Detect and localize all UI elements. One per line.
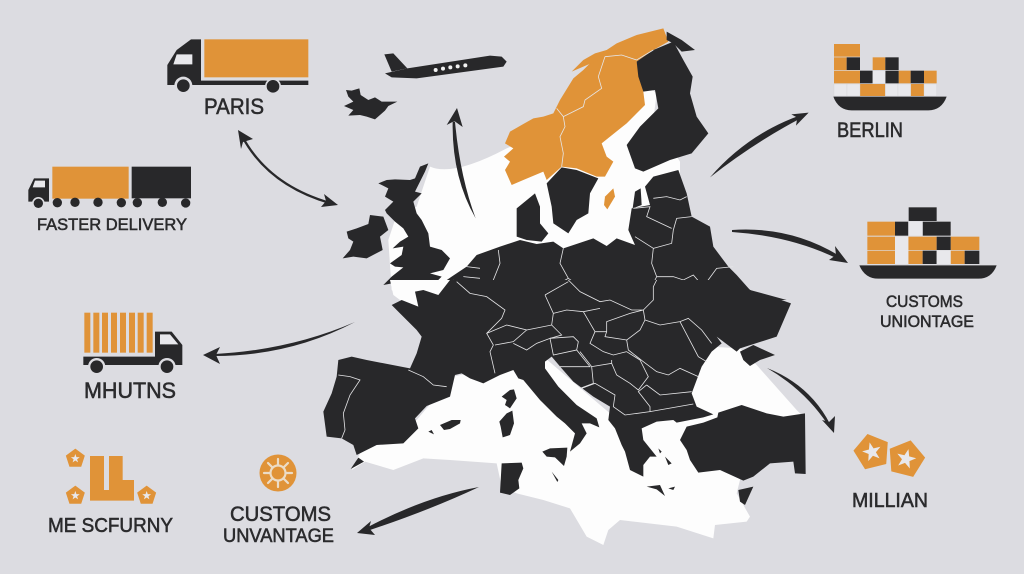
arrow: toward Berlin ship <box>710 113 809 177</box>
arrow: toward Mhutns truck <box>203 322 355 364</box>
label: Uniontage: UNIONTAGE <box>880 312 974 331</box>
label: Customs: CUSTOMS <box>230 503 331 526</box>
arrow: toward customs ship <box>732 230 848 263</box>
northern borders <box>453 50 733 300</box>
Corsica <box>502 389 517 408</box>
label: Customs: CUSTOMS <box>886 292 963 311</box>
icon: star badges <box>850 430 928 479</box>
Sicily <box>542 448 567 466</box>
label: Paris: PARIS <box>204 94 264 119</box>
northern Norway fringe <box>572 50 607 72</box>
Iberian tip <box>351 458 364 469</box>
Saaremaa <box>633 188 642 208</box>
icon: container ship <box>833 44 947 110</box>
item: Mhutns truck <box>83 313 182 403</box>
Great Britain <box>378 163 450 285</box>
icon: delivery truck <box>167 39 308 95</box>
item: Customs Unvantage <box>223 454 334 547</box>
Iceland <box>344 88 397 119</box>
southern continent <box>323 280 791 477</box>
arrow: toward Customs Unvantage <box>357 487 479 535</box>
channel sea <box>390 280 453 310</box>
Ireland <box>343 215 388 258</box>
label: Berlin: BERLIN <box>837 119 903 142</box>
icon: container ship <box>859 207 997 279</box>
item: Berlin ship <box>833 44 947 142</box>
Kola tip <box>667 32 695 52</box>
item: Me Scfurny <box>48 449 173 537</box>
Crete and islets <box>552 448 675 496</box>
label: Millian: MILLIAN <box>852 490 928 512</box>
map of Europe <box>323 28 806 545</box>
Sardinia <box>499 411 514 437</box>
icon: gear badge <box>260 454 296 492</box>
southern borders <box>338 280 712 438</box>
label: Me Scfurny: ME SCFURNY <box>48 515 173 537</box>
Norway and northern Sweden <box>504 28 668 185</box>
label: faster delivery: FASTER DELIVERY <box>37 215 187 234</box>
Mediterranean and Black Sea <box>352 347 803 545</box>
icon: slatted truck <box>83 313 182 375</box>
Denmark <box>517 193 548 242</box>
icon: road train <box>28 167 191 210</box>
northern map section <box>343 28 787 303</box>
southern Sweden <box>547 167 598 233</box>
item: Paris truck <box>167 39 308 119</box>
icon: warehouse blocks with stars <box>66 449 156 504</box>
item: Millian <box>850 430 928 512</box>
Turkey <box>680 405 806 481</box>
northern seas <box>388 80 680 303</box>
north African headland <box>500 463 523 495</box>
label: Mhutns: MHUTNS <box>84 378 176 403</box>
arrow: toward Millian <box>767 368 835 433</box>
item: customs union ship <box>859 207 997 331</box>
icon: airplane <box>384 53 507 78</box>
arrow: double-headed Paris route <box>238 130 338 207</box>
Gotland <box>604 188 615 209</box>
arrow: toward airplane <box>447 108 476 218</box>
item: faster delivery <box>28 167 191 234</box>
Crimea and Caucasus edge <box>740 345 775 366</box>
southern map section <box>323 280 806 545</box>
Cyprus <box>738 487 753 505</box>
Balearic islands <box>428 420 461 434</box>
label: Unvantage: UNVANTAGE <box>223 526 334 547</box>
Finland <box>627 42 708 172</box>
northern continent <box>413 170 787 300</box>
